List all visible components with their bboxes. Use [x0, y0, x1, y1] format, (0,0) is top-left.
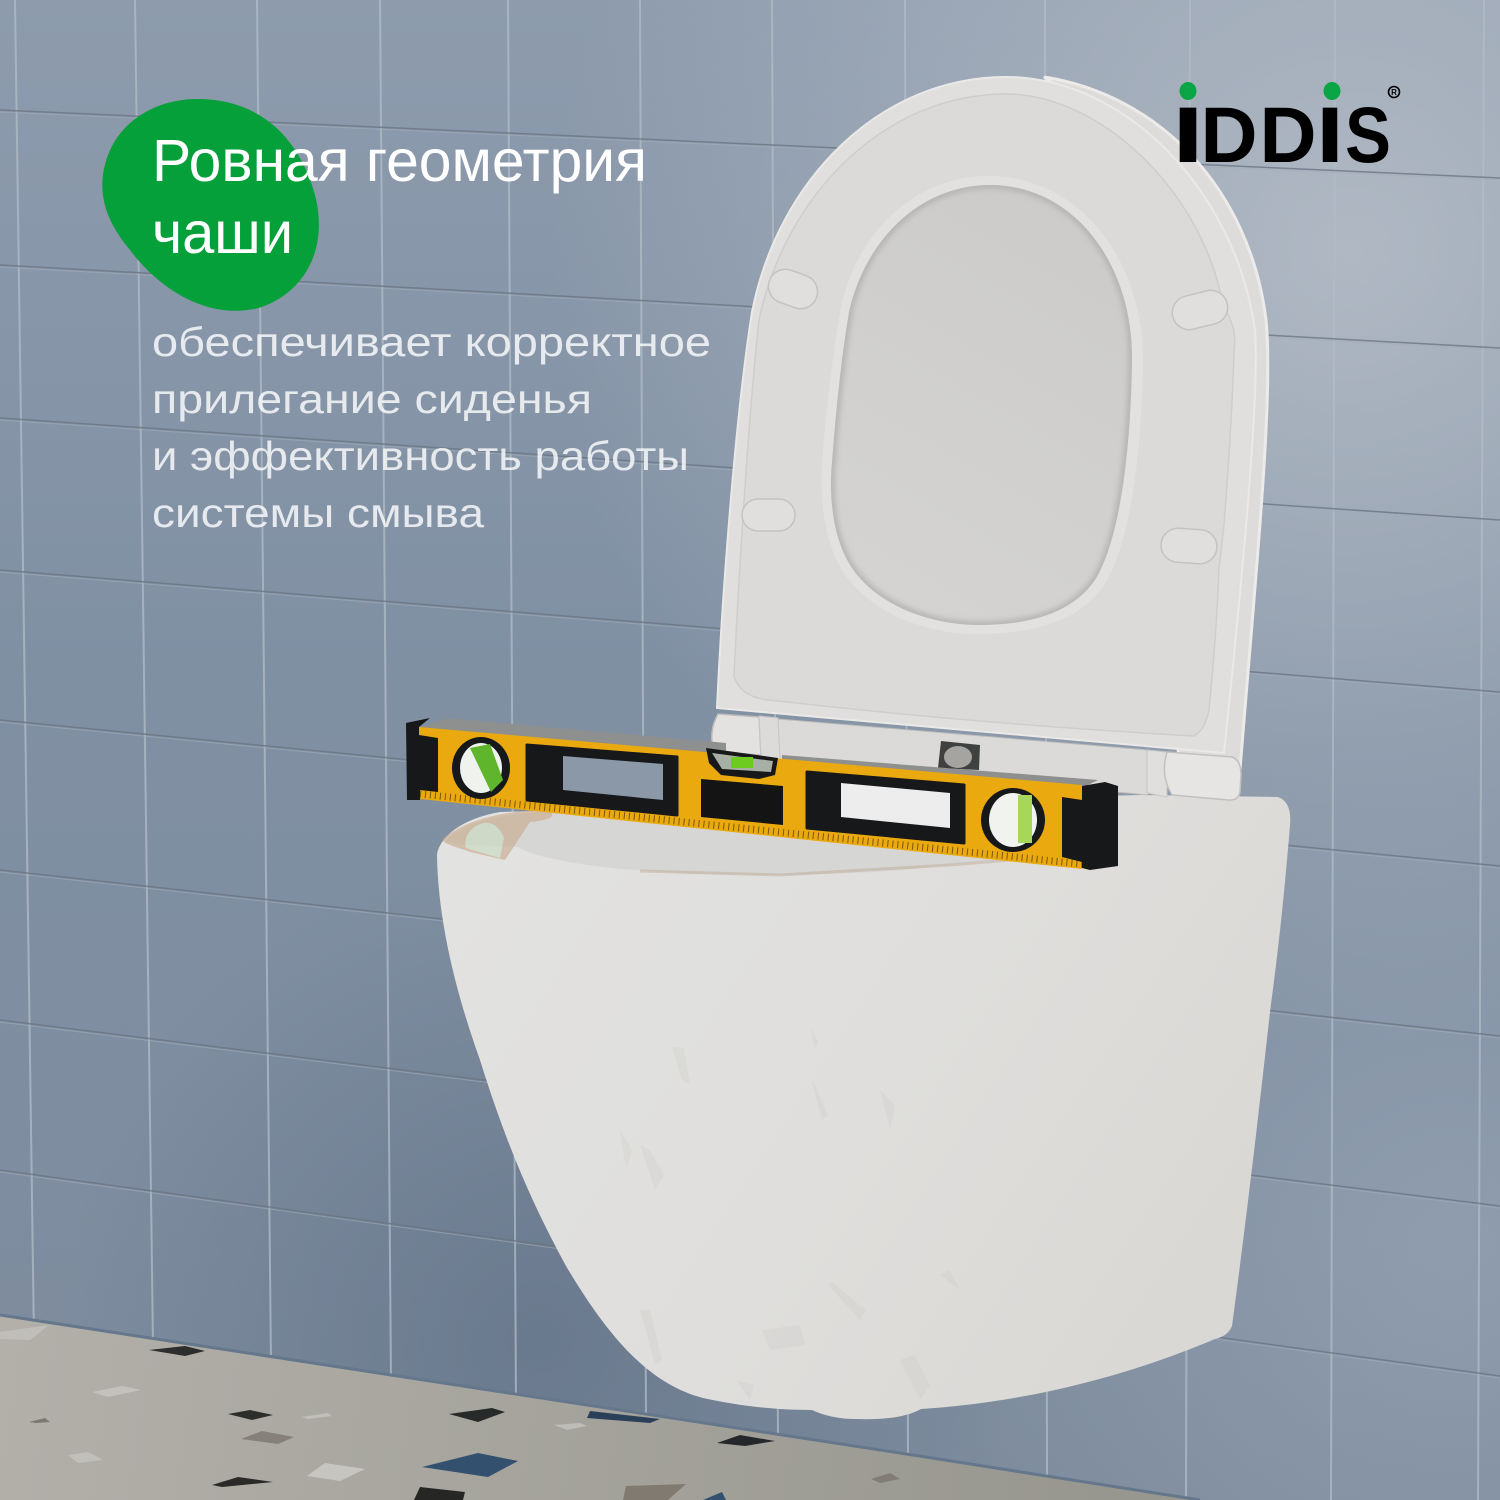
body text: [152, 319, 711, 536]
hinge right groove: [1147, 750, 1167, 797]
hinge right block: [1164, 752, 1241, 800]
left end cap: [406, 718, 438, 800]
seat opening: [831, 185, 1132, 625]
top vial: [706, 748, 778, 779]
body text: системы смыва: [152, 490, 484, 536]
IDDIS logo: I: [1316, 90, 1344, 179]
right end cap: [1062, 782, 1118, 870]
IDDIS logo: D: [1260, 90, 1317, 179]
left vial: [452, 737, 510, 799]
seat opening ring: [822, 176, 1143, 634]
opening inner shadow: [831, 185, 1132, 625]
heading: [152, 128, 647, 266]
IDDIS logo: D: [1200, 90, 1258, 179]
level reflection: [442, 810, 1010, 875]
bowl body: [437, 795, 1290, 1419]
glaze speckles: [620, 1025, 960, 1400]
black window: [701, 779, 783, 825]
terrazzo floor: [0, 1315, 1200, 1500]
heading: Ровная геометрия: [152, 128, 647, 194]
bumper bottom right: [1160, 527, 1218, 565]
lid underside: [717, 77, 1256, 753]
right handle: [807, 772, 964, 843]
bumper top left: [764, 264, 822, 314]
IDDIS logo: [1172, 82, 1400, 179]
lid back shell: [1044, 77, 1268, 795]
IDDIS logo: I: [1172, 90, 1204, 179]
toilet bowl: [437, 795, 1290, 1419]
IDDIS logo: R: [1391, 88, 1397, 97]
body text: обеспечивает корректное: [152, 319, 711, 365]
green blob: [102, 99, 319, 311]
toilet seat lid: [712, 77, 1268, 800]
left handle: [527, 745, 677, 815]
heading: чаши: [152, 200, 293, 266]
body text: и эффективность работы: [152, 433, 689, 479]
bowl opening: [445, 811, 997, 875]
metal fitting: [938, 741, 980, 770]
bumper bottom left: [742, 499, 795, 531]
right vial: [981, 788, 1045, 852]
hinge left block: [712, 714, 761, 755]
body text: прилегание сиденья: [152, 376, 592, 422]
yellow body: [419, 727, 1082, 869]
bumper top right: [1169, 287, 1231, 333]
seat inner recess: [734, 94, 1235, 736]
hinge left groove: [759, 716, 780, 760]
hinge strip: [778, 719, 1148, 795]
ruler ticks: [420, 794, 1082, 864]
spirit level: [406, 718, 1118, 870]
IDDIS logo: S: [1345, 90, 1391, 179]
grey top face: [419, 718, 1098, 788]
